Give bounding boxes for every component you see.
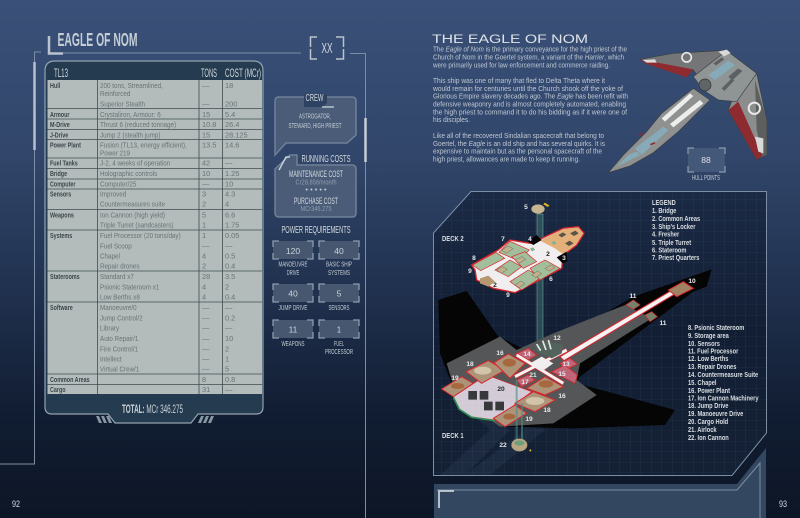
white cross corridors <box>515 350 567 383</box>
table column: cost: 0.2 <box>225 314 235 322</box>
table column: tons: — <box>202 100 210 108</box>
table column: cost: 200 <box>225 100 237 108</box>
panel: running costs: RUNNING COSTS <box>302 154 351 165</box>
table column: cost: — <box>225 324 233 332</box>
table column: tons <box>202 81 216 394</box>
panel: ship specification table: COST (MCr) <box>225 66 261 80</box>
table column: descriptions: Virtual Crew/1 <box>100 366 140 374</box>
power: manoeuvre drive: MANOEUVRE <box>278 260 308 268</box>
power: fuel processor <box>319 320 359 356</box>
table column: categories: Systems <box>50 232 73 240</box>
legend: deck 1: 13. Repair Drones <box>688 363 737 371</box>
deck labels: 8 <box>472 255 476 262</box>
table column: categories: Weapons <box>50 212 74 220</box>
hull outline <box>472 227 584 293</box>
table column: cost: 1.75 <box>225 220 239 230</box>
deck labels: 7 <box>501 236 505 243</box>
table column: cost: 18 <box>225 81 233 90</box>
table column: descriptions: Countermeasures suite <box>100 201 165 209</box>
table column: cost: 28.125 <box>225 130 248 140</box>
table column: descriptions: Auto Repair/1 <box>100 336 139 343</box>
table column: tons: — <box>202 314 210 322</box>
table column: cost: — <box>225 385 233 394</box>
table column: tons: — <box>202 81 210 90</box>
table column: categories: Common Areas <box>50 376 90 384</box>
power: basic ship systems: 40 <box>334 246 344 256</box>
page number 93: 93 <box>779 499 787 509</box>
text block: ship description: high priest, allowances are made to keep it running. <box>433 156 580 164</box>
table column: categories <box>50 82 90 394</box>
illustration: Eagle of Nom ship <box>608 50 767 173</box>
table column: cost: 0.4 <box>225 262 235 270</box>
legend: deck 1: 18. Jump Drive <box>688 402 729 410</box>
table column: descriptions: Standard x7 <box>100 274 134 281</box>
table column: tons: 2 <box>202 200 206 208</box>
deck labels: 18 <box>543 407 551 414</box>
power: jump drive: JUMP DRIVE <box>278 303 308 312</box>
deck labels: 16 <box>496 350 504 357</box>
lift beams <box>516 380 518 440</box>
notch stripes <box>96 416 214 423</box>
table column: descriptions: Fire Control/1 <box>100 346 138 354</box>
panel: hull points: HULL POINTS <box>692 173 720 182</box>
table column: tons: 1 <box>202 231 206 240</box>
page number 92: 92 <box>12 499 20 509</box>
text block: ship description: Like all of the recovered Sindalian spacecraft that belong to <box>433 133 604 140</box>
legend: deck 1: 22. Ion Cannon <box>688 434 729 442</box>
legend: deck 2: 1. Bridge <box>652 207 677 215</box>
text block: ship description: Glorious Empire slavery decades ago. The Eagle has been refit with <box>433 94 628 100</box>
table column: cost: 6.6 <box>225 210 235 220</box>
deck labels: 13 <box>562 361 570 368</box>
legend: deck 1: 16. Power Plant <box>688 387 731 395</box>
green seats <box>530 241 556 251</box>
table column: descriptions: Crystaliron, Armour: 6 <box>100 112 161 119</box>
table column: categories: Sensors <box>50 191 72 199</box>
legend: deck 2: LEGEND <box>652 199 676 207</box>
table column: categories: Computer <box>50 181 76 189</box>
table column: cost: — <box>225 303 233 312</box>
legend: deck 1: 19. Manoeuvre Drive <box>688 410 744 418</box>
power: sensors: SENSORS <box>328 303 350 312</box>
table column: cost: 10 <box>225 334 233 343</box>
table column: tons: 15 <box>202 130 210 140</box>
table column: tons: — <box>202 364 210 374</box>
text block: ship description <box>432 46 628 164</box>
table column: tons: 4 <box>202 252 206 260</box>
power: fuel processor: PROCESSOR <box>325 347 353 356</box>
text block: ship description: were primarily used for law enforcement and commerce raiding. <box>432 62 610 70</box>
table column: cost: 0.05 <box>225 231 239 240</box>
table column: descriptions: Jump 2 (stealth jump) <box>100 132 160 140</box>
central block <box>693 51 757 102</box>
table column: descriptions: Psionic Stateroom x1 <box>100 284 160 292</box>
panel: running costs: Cr28,856/month <box>296 178 336 186</box>
table column: descriptions: Thrust 6 (reduced tonnage) <box>100 122 176 129</box>
table column: cost: 4 <box>225 200 229 208</box>
table column: tons: 4 <box>202 292 206 302</box>
table column: descriptions <box>100 83 187 374</box>
panel: crew: ASTROGATOR, <box>299 112 331 120</box>
table column: descriptions: Fuel Scoop <box>100 243 132 251</box>
power: jump drive: 40 <box>288 288 298 298</box>
deck labels: 10 <box>688 278 696 285</box>
text block: ship description: would remain for centuries until the Church shook off the yoke of <box>432 86 623 93</box>
power: jump drive <box>273 284 313 312</box>
panel: running costs: MAINTENANCE COST <box>289 169 343 180</box>
panel: running costs: PURCHASE COST <box>294 196 338 207</box>
blue panels <box>617 152 640 167</box>
legend: deck 1: 21. Airlock <box>688 426 717 434</box>
pink rooms <box>515 348 577 387</box>
deck labels: 5 <box>524 204 528 211</box>
legend: deck 1: 9. Storage area <box>688 332 729 340</box>
panel: ship specification table: TONS <box>201 66 217 80</box>
deck labels: 6 <box>549 276 553 283</box>
table column: descriptions: Ion Cannon (high yield) <box>100 212 165 220</box>
table column: tons: 3 <box>202 190 206 198</box>
panel: crew: STEWARD, HIGH PRIEST <box>288 121 342 130</box>
panel: power requirements: POWER REQUIREMENTS <box>282 224 350 236</box>
table column: categories: Fuel Tanks <box>50 160 78 168</box>
table column: categories: Armour <box>50 111 70 119</box>
table column: cost: 3.5 <box>225 272 235 281</box>
deck labels: 2 <box>546 251 550 258</box>
table column: tons: 2 <box>202 262 206 270</box>
heading: ship title: EAGLE OF NOM <box>58 30 138 50</box>
table column: tons: — <box>202 334 210 343</box>
table column: categories: Hull <box>50 82 60 90</box>
deck labels: DECK 2 <box>442 235 464 243</box>
legend: deck 2: 2. Common Areas <box>652 215 700 223</box>
deck labels: 11 <box>630 293 637 300</box>
table column: categories: Power Plant <box>50 142 82 150</box>
table column: descriptions: Fuel Processor (20 tons/day) <box>100 233 181 240</box>
staterooms <box>473 241 560 290</box>
legend: deck 2: 4. Fresher <box>652 231 680 239</box>
text block: ship description: This ship was one of many that fled to Delta Theta where it <box>433 78 605 85</box>
central corridor <box>560 289 676 361</box>
deck labels: 21 <box>529 372 537 379</box>
priest quarters <box>540 227 583 254</box>
text block: ship description: Church of Nom in the Goertel system, a variant of the Harrier, which <box>433 54 624 62</box>
table column: descriptions: Repair drones <box>100 263 140 271</box>
table column: categories: M-Drive <box>50 121 70 129</box>
text block: ship description: Goertel, the Eagle is an old ship and has several quirks. It is <box>433 141 605 148</box>
table column: tons: — <box>202 242 210 250</box>
hub <box>699 79 711 91</box>
power: weapons: WEAPONS <box>282 339 305 348</box>
table column: tons: 28 <box>202 272 210 281</box>
table column: cost: 5.4 <box>225 110 235 119</box>
deck labels: 15 <box>558 371 566 378</box>
deck labels: 4 <box>528 236 532 243</box>
table column: descriptions: Fusion (TL13, energy efficient), <box>100 142 187 150</box>
power: weapons <box>273 320 313 348</box>
table column: descriptions: Library <box>100 325 120 333</box>
deck labels: 9 <box>468 268 472 275</box>
deck labels: 14 <box>523 351 531 358</box>
table column: descriptions: Jump Control/2 <box>100 315 143 323</box>
deck labels: 22 <box>499 442 507 449</box>
legend: deck 1: 17. Ion Cannon Machinery <box>688 395 759 403</box>
power: weapons: 11 <box>289 324 298 334</box>
table column: cost: 2 <box>225 282 229 292</box>
badge: XX <box>310 37 344 59</box>
table column: descriptions: J-2, 4 weeks of operation <box>100 160 170 168</box>
deck labels: 19 <box>525 416 533 423</box>
heading: ship title <box>49 30 138 54</box>
table column: categories: J-Drive <box>50 132 69 140</box>
white panels <box>662 93 693 122</box>
power: fuel processor: 1 <box>337 324 342 334</box>
table column: descriptions: Manoeuvre/0 <box>100 305 137 312</box>
table column: descriptions: Computer/25 <box>100 181 136 189</box>
sensors room <box>668 282 693 297</box>
panel: hull points <box>688 148 725 182</box>
table column: descriptions: Intellect <box>100 356 122 364</box>
right wing <box>728 73 767 159</box>
badge: XX: XX <box>322 40 332 57</box>
table column: tons: 13.5 <box>202 140 216 150</box>
legend: deck 2: 5. Triple Turret <box>652 239 692 247</box>
deck labels: 18 <box>466 361 474 368</box>
panel: power requirements <box>273 224 359 356</box>
table column: cost: 0.4 <box>225 292 235 302</box>
tan engineering rooms <box>442 354 563 427</box>
table column: descriptions: Low Berths x8 <box>100 294 140 302</box>
table column: descriptions: Improved <box>100 191 126 199</box>
table column: descriptions: Power 219 <box>100 150 130 158</box>
table column: categories: Staterooms <box>50 273 80 281</box>
table column: cost: — <box>225 242 233 250</box>
panel: running costs <box>275 154 356 217</box>
legend: deck 1: 10. Sensors <box>688 340 720 348</box>
upper wing <box>640 50 737 83</box>
legend: deck 1: 11. Fuel Processor <box>688 348 739 356</box>
table column: tons: 42 <box>202 158 210 168</box>
fuel processors <box>626 300 657 322</box>
text block: ship description: The Eagle of Nom is the primary conveyance for the high priest of the <box>433 46 627 54</box>
deck 2 plan <box>472 203 584 293</box>
legend: deck 1: 14. Countermeasure Suite <box>688 371 758 379</box>
text block: ship description: defensive weaponry and is almost completely automated, enabling <box>433 102 626 108</box>
table column: descriptions: Holographic controls <box>100 171 158 178</box>
gray deck <box>447 305 652 427</box>
power: manoeuvre drive: DRIVE <box>287 268 299 277</box>
table column: tons: 5 <box>202 210 206 220</box>
panel: deck plan frame <box>434 192 766 476</box>
legend: deck 2: 3. Ship's Locker <box>652 223 696 231</box>
panel: running costs: MCr346.275 <box>300 204 332 213</box>
legend: deck 1: 15. Chapel <box>688 379 717 387</box>
table column: descriptions: 200 tons, Streamlined, <box>100 83 163 90</box>
deck labels: DECK 1 <box>442 432 464 440</box>
table column: categories: Software <box>50 304 73 312</box>
low berths <box>535 342 563 358</box>
deck labels: 20 <box>497 386 505 393</box>
deck labels: 11 <box>660 320 667 327</box>
beam: deck connection lift <box>537 214 543 364</box>
text block: ship description: his disciples. <box>433 117 470 124</box>
power: basic ship systems <box>319 241 359 277</box>
table column: descriptions: Chapel <box>100 253 120 261</box>
legend: deck 1: 12. Low Berths <box>688 355 729 363</box>
deck labels: 12 <box>553 335 561 342</box>
table column: tons: — <box>202 344 210 354</box>
deck labels: 9 <box>506 292 510 299</box>
table column: cost: 5 <box>225 364 229 374</box>
table column: tons: — <box>202 303 210 312</box>
legend: deck 2 <box>652 199 700 262</box>
deck labels: 2 <box>493 282 497 289</box>
panel: crew: CREW <box>306 93 324 104</box>
power: sensors <box>319 284 359 312</box>
panel: ship specification table <box>45 61 263 423</box>
table column: tons: — <box>202 180 210 188</box>
table column: cost: 2 <box>225 344 229 354</box>
panel: ship specification table: TL13 <box>54 66 68 80</box>
table column: tons: 8 <box>202 375 206 384</box>
triple turret <box>531 204 545 214</box>
legend: deck 1: 20. Cargo Hold <box>688 418 728 426</box>
table column: tons: 1 <box>202 220 206 230</box>
table column: cost: 1 <box>225 354 229 364</box>
legend: deck 2: 7. Priest Quarters <box>652 254 700 262</box>
black nooks <box>528 235 567 263</box>
legend: deck 2: 6. Stateroom <box>652 247 687 255</box>
cargo crates <box>468 391 504 410</box>
deck labels: 19 <box>451 375 459 382</box>
deck 1 plan <box>438 269 712 451</box>
deck labels: 17 <box>521 379 529 386</box>
power: manoeuvre drive: 120 <box>286 246 300 256</box>
legend: deck 1 <box>688 324 759 442</box>
panel: ship specification table: TOTAL: MCr 346.275 <box>122 402 183 416</box>
text block: ship description: expensive to maintain but as the personal spacecraft of the <box>433 148 602 156</box>
body <box>608 88 710 173</box>
table column: cost: — <box>225 158 233 168</box>
power: fuel processor: FUEL <box>334 339 344 348</box>
table column: descriptions: Superior Stealth <box>100 101 145 109</box>
deck labels: 16 <box>558 393 566 400</box>
table column: cost: 26.4 <box>225 120 239 129</box>
table column: tons: — <box>202 354 210 364</box>
table column: cost: 0.8 <box>225 375 235 384</box>
table column: tons: 15 <box>202 110 210 119</box>
table column: cost: 0.5 <box>225 252 235 260</box>
heading: The Eagle of Nom: THE EAGLE OF NOM <box>432 34 588 46</box>
panel: bottom empty box <box>434 448 766 518</box>
power: basic ship systems: BASIC SHIP <box>326 260 352 268</box>
table column: categories: Cargo <box>50 386 66 394</box>
table column: tons: 4 <box>202 282 206 292</box>
table column: descriptions: Reinforced <box>100 91 131 98</box>
table column: cost: 10 <box>225 180 233 188</box>
table column: cost: 1.25 <box>225 169 239 178</box>
legend: deck 1: 8. Psionic Stateroom <box>688 324 744 332</box>
storage <box>480 276 495 287</box>
ion cannon turret <box>511 439 527 451</box>
black hull <box>438 269 712 428</box>
table column: categories: Bridge <box>50 170 67 178</box>
panel: hull points: 88 <box>701 155 711 165</box>
deck labels <box>442 204 696 449</box>
power: sensors: 5 <box>337 288 342 298</box>
table column: cost <box>225 81 248 394</box>
table column: cost: 4.3 <box>225 190 235 198</box>
power: manoeuvre drive <box>273 241 313 277</box>
cargo hold <box>453 375 532 420</box>
table column: tons: 10 <box>202 169 210 178</box>
left page frame <box>0 52 366 518</box>
power: basic ship systems: SYSTEMS <box>328 268 350 277</box>
deck labels: 3 <box>562 255 566 262</box>
text block: ship description: the high priest to command it to do his bidding as if it were one of <box>433 110 627 116</box>
table column: tons: — <box>202 324 210 332</box>
panel: crew <box>275 93 356 155</box>
table column: descriptions: Triple Turret (sandcasters) <box>100 222 173 230</box>
table column: cost: 14.6 <box>225 140 239 150</box>
table column: tons: 10.8 <box>202 120 216 129</box>
panel: running costs: • • • • • <box>305 185 327 194</box>
table column: tons: 31 <box>202 385 210 394</box>
